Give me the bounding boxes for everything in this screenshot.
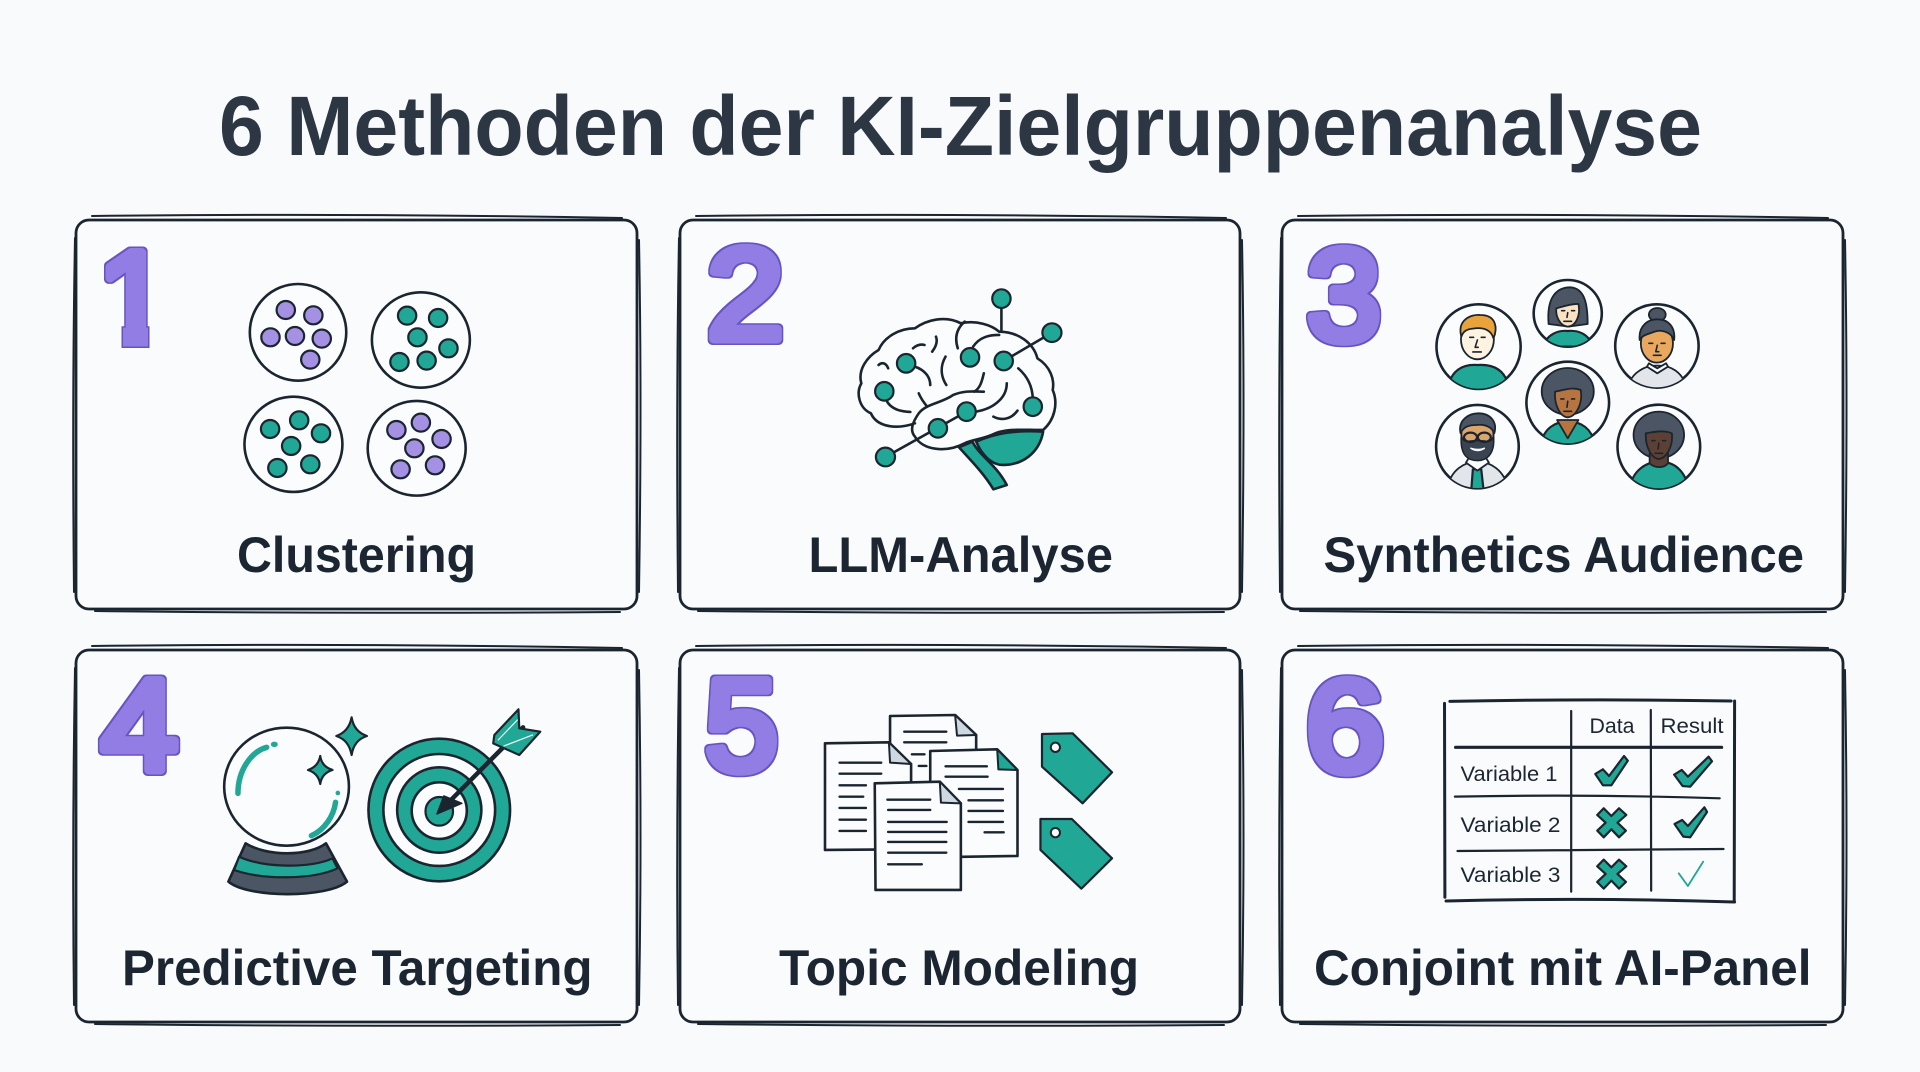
icon: six persona avatars bbox=[1436, 280, 1700, 490]
panel: Clustering bbox=[73, 215, 640, 613]
panel: Topic Modeling bbox=[677, 645, 1244, 1026]
avatar: man with dark afro bbox=[1617, 405, 1700, 490]
table row labels bbox=[1460, 763, 1560, 887]
avatar: woman with hair bun bbox=[1615, 304, 1699, 388]
number 6: 6 bbox=[1306, 653, 1384, 799]
label: Clustering bbox=[237, 527, 476, 583]
icon: brain with network nodes bbox=[859, 289, 1062, 489]
avatar: woman with afro bbox=[1526, 362, 1609, 445]
icon: four clusters of dots bbox=[244, 284, 470, 496]
panel: LLM-Analyse bbox=[677, 215, 1244, 613]
label: Conjoint mit AI-Panel bbox=[1314, 940, 1812, 996]
icon: stack of documents and tags bbox=[825, 715, 1112, 890]
conjoint table bbox=[1445, 700, 1735, 902]
number 2: 2 bbox=[707, 221, 784, 367]
number 4: 4 bbox=[101, 652, 178, 798]
table row labels: Variable 2 bbox=[1460, 814, 1560, 837]
tags bbox=[1040, 733, 1112, 889]
title: 6 Methoden der KI-Zielgruppenanalyse bbox=[219, 79, 1702, 173]
panel: Predictive Targeting bbox=[73, 645, 640, 1026]
label: Topic Modeling bbox=[779, 940, 1139, 996]
number 3: 3 bbox=[1307, 222, 1381, 368]
table row labels: Variable 1 bbox=[1460, 763, 1558, 786]
table header text: Data bbox=[1590, 715, 1635, 738]
table row labels: Variable 3 bbox=[1460, 864, 1560, 887]
documents bbox=[825, 715, 1017, 890]
table header text bbox=[1590, 715, 1724, 738]
label: Synthetics Audience bbox=[1324, 527, 1804, 583]
table grid and marks bbox=[1445, 700, 1735, 902]
crystal ball bbox=[224, 717, 367, 894]
table header text: Result bbox=[1660, 715, 1724, 738]
panel: Synthetics Audience bbox=[1279, 215, 1846, 613]
avatar: blond man bbox=[1436, 304, 1521, 390]
number 1: 1 bbox=[98, 224, 170, 370]
label: Predictive Targeting bbox=[122, 940, 592, 996]
avatar: bearded man with glasses bbox=[1436, 405, 1519, 490]
icon: crystal ball and target bbox=[224, 709, 540, 894]
label: LLM-Analyse bbox=[808, 527, 1113, 583]
target with arrow bbox=[368, 709, 540, 881]
avatar: woman with dark bob bbox=[1534, 280, 1602, 347]
panel: Conjoint mit AI-Panel bbox=[1279, 645, 1846, 1026]
number 5: 5 bbox=[705, 652, 778, 798]
